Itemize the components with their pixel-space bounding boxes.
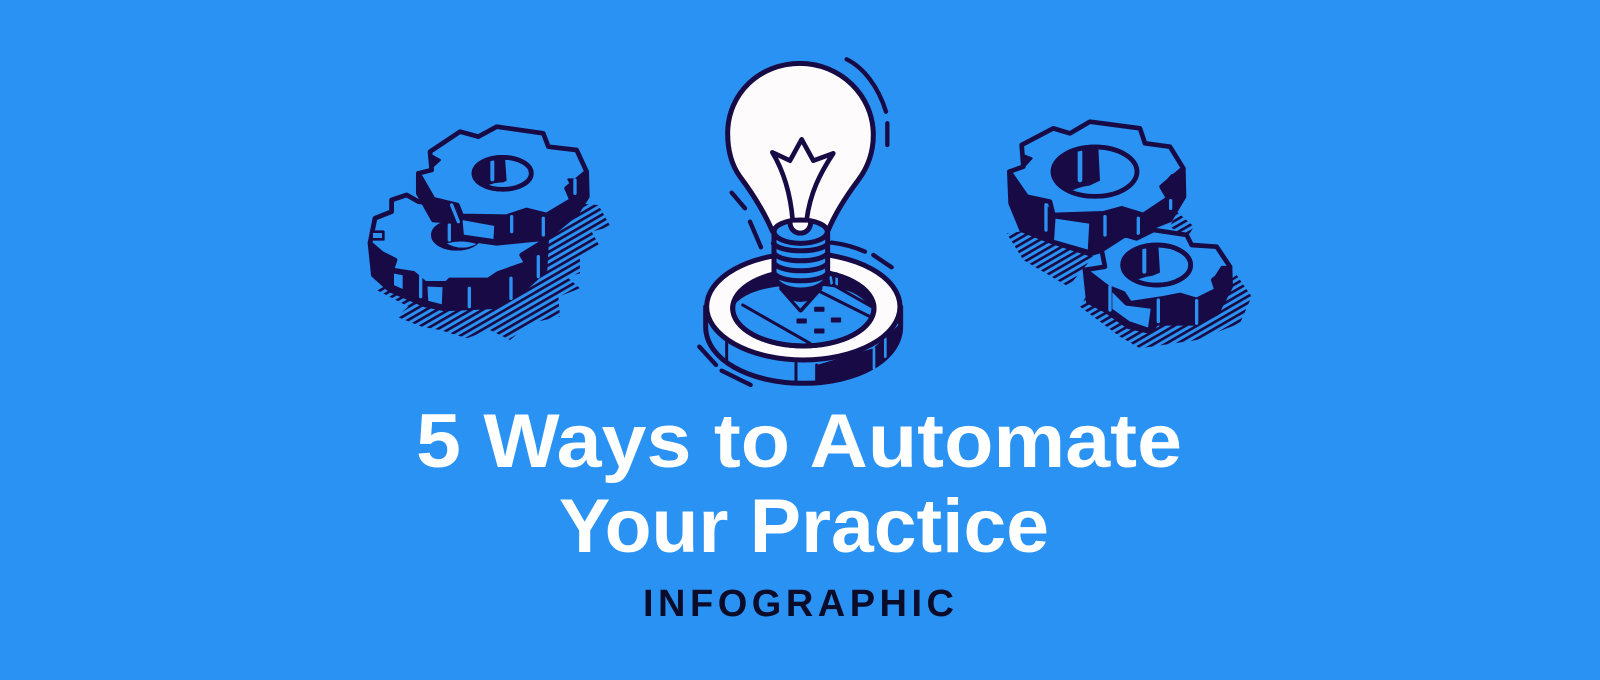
lower gear body bbox=[370, 195, 547, 309]
upper gear body bbox=[418, 127, 587, 243]
icon: right pair of gears bbox=[1007, 122, 1252, 348]
title bbox=[416, 399, 1182, 569]
title line one: 5 Ways to Automate bbox=[416, 399, 1182, 484]
subtitle: INFOGRAPHIC bbox=[643, 583, 954, 625]
filament bbox=[772, 139, 833, 220]
title line two: Your Practice bbox=[559, 484, 1049, 569]
bulb glass bbox=[728, 63, 873, 232]
icon: light bulb in ring bbox=[699, 59, 901, 385]
bulb tip bbox=[782, 288, 820, 310]
small gear body bbox=[1085, 230, 1231, 332]
bulb screw base bbox=[773, 220, 828, 310]
ring coin bbox=[706, 253, 901, 383]
right gears hatched shadows bbox=[1007, 212, 1252, 348]
icon: left pair of gears bbox=[370, 127, 611, 340]
large gear body bbox=[1009, 122, 1184, 254]
left gears hatched shadow bbox=[377, 203, 611, 340]
motion dashes bbox=[699, 59, 892, 385]
